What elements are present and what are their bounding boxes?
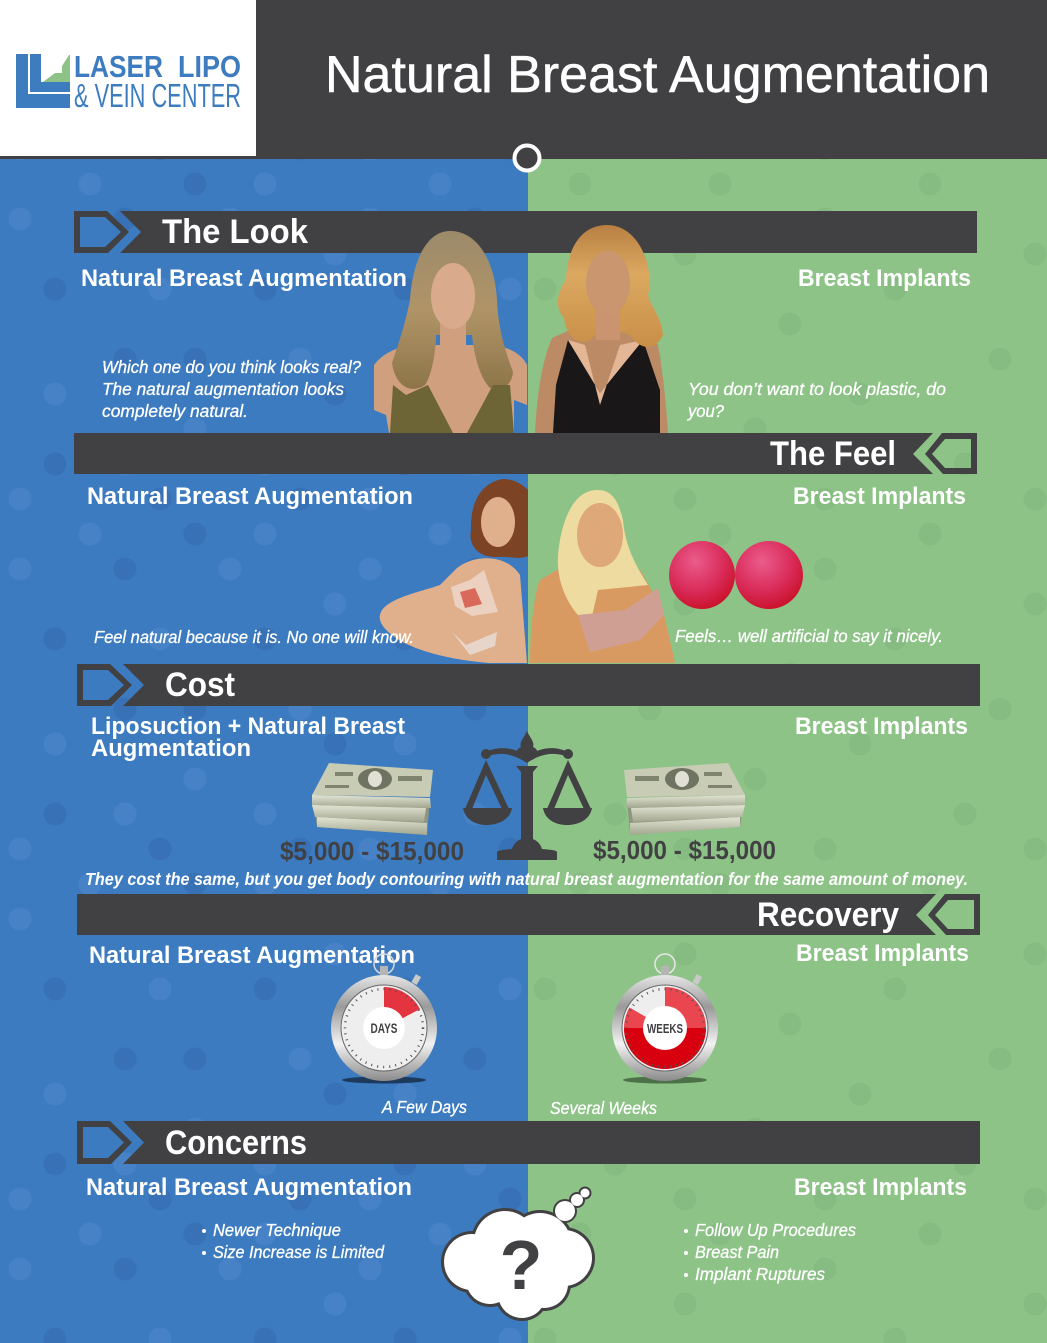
list: natural concerns: Size Increase is Limited bbox=[213, 1242, 385, 1262]
heading bar: Cost bbox=[77, 664, 980, 706]
list: natural concerns bbox=[202, 1220, 385, 1262]
photo: implants woman bbox=[535, 225, 668, 433]
heading bar: Recovery bbox=[77, 894, 980, 935]
logo: LIPO bbox=[178, 49, 241, 84]
text: cost note: They cost the same, but you get body contouring with natural breast augmentation for the same amount of money. bbox=[85, 869, 968, 889]
text: look natural: completely natural. bbox=[102, 401, 248, 421]
subheading left bbox=[91, 713, 405, 762]
header band bbox=[0, 0, 1047, 159]
text: several weeks: Several Weeks bbox=[550, 1098, 657, 1118]
icon: money stack left bbox=[312, 763, 433, 835]
list: implant concerns: Implant Ruptures bbox=[695, 1264, 825, 1284]
text: look natural: Which one do you think looks real? bbox=[102, 357, 361, 377]
icon: stopwatch days: DAYS bbox=[370, 1021, 398, 1036]
icon: thought cloud: ? bbox=[500, 1226, 542, 1304]
subheading left: Augmentation bbox=[91, 735, 251, 762]
subheading right: Breast Implants bbox=[796, 940, 969, 967]
list: implant concerns bbox=[684, 1220, 856, 1284]
icon: money stack right bbox=[624, 763, 745, 835]
subheading right: Breast Implants bbox=[793, 483, 966, 510]
subheading right: Breast Implants bbox=[798, 265, 971, 292]
heading bar: Concerns: Concerns bbox=[165, 1124, 307, 1162]
list: implant concerns: Breast Pain bbox=[695, 1242, 779, 1262]
list: natural concerns: Newer Technique bbox=[213, 1220, 341, 1240]
heading bar: Recovery: Recovery bbox=[757, 896, 899, 934]
icon: implants bbox=[669, 541, 803, 609]
photo: natural woman bbox=[374, 231, 527, 433]
subheading right: Breast Implants bbox=[794, 1174, 967, 1201]
price right: $5,000 - $15,000 bbox=[593, 835, 776, 865]
photo: blonde woman bbox=[530, 490, 675, 663]
section: The Look bbox=[74, 211, 977, 433]
heading bar: Concerns bbox=[77, 1121, 980, 1164]
icon: stopwatch days bbox=[331, 954, 437, 1084]
subheading left: Natural Breast Augmentation bbox=[87, 483, 413, 510]
logo bbox=[0, 0, 256, 156]
text: a few days: A Few Days bbox=[381, 1097, 467, 1117]
logo: LASER bbox=[74, 49, 163, 84]
heading bar: The Feel: The Feel bbox=[770, 435, 896, 473]
background: green side bbox=[528, 159, 1047, 1343]
title: Natural Breast Augmentation bbox=[325, 46, 990, 104]
list: implant concerns: Follow Up Procedures bbox=[695, 1220, 856, 1240]
icon: stopwatch weeks: WEEKS bbox=[647, 1021, 683, 1036]
heading bar: The Feel bbox=[74, 433, 977, 474]
text: feel implants: Feels… well artificial to say it nicely. bbox=[675, 626, 943, 646]
subheading left: Natural Breast Augmentation bbox=[81, 265, 407, 292]
text: look implants: you? bbox=[687, 401, 724, 421]
background: blue side bbox=[0, 159, 528, 1343]
center circle marker bbox=[514, 146, 540, 170]
icon: stopwatch weeks bbox=[612, 954, 718, 1084]
logo: & VEIN CENTER bbox=[74, 77, 241, 114]
subheading right: Breast Implants bbox=[795, 713, 968, 740]
text: look natural bbox=[102, 357, 361, 421]
section: Concerns bbox=[77, 1121, 980, 1321]
text: look implants bbox=[687, 379, 946, 421]
subheading left: Natural Breast Augmentation bbox=[89, 942, 415, 969]
section: The Feel bbox=[74, 433, 977, 663]
heading bar: Cost: Cost bbox=[165, 666, 235, 704]
section: Recovery bbox=[77, 894, 980, 1118]
text: feel natural: Feel natural because it is. No one will know. bbox=[94, 627, 414, 647]
heading bar: The Look bbox=[74, 211, 977, 253]
heading bar: The Look: The Look bbox=[162, 213, 308, 251]
photo: seated woman bbox=[380, 479, 528, 663]
text: look natural: The natural augmentation looks bbox=[102, 379, 344, 399]
text: look implants: You don’t want to look plastic, do bbox=[688, 379, 946, 399]
subheading left: Liposuction + Natural Breast bbox=[91, 713, 405, 740]
icon: thought cloud bbox=[441, 1186, 595, 1321]
subheading left: Natural Breast Augmentation bbox=[86, 1174, 412, 1201]
icon: balance scale bbox=[463, 731, 592, 860]
section: Cost bbox=[77, 664, 980, 889]
price left: $5,000 - $15,000 bbox=[280, 836, 464, 866]
